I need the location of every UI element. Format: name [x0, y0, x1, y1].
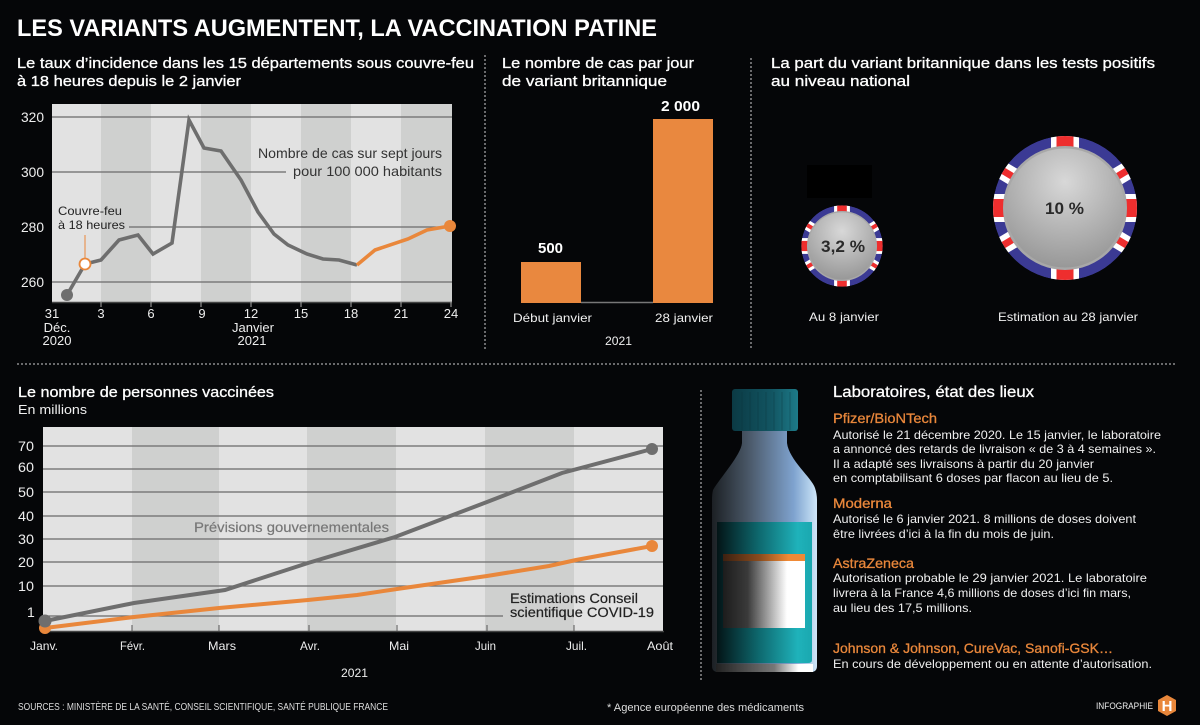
y axis labels: 320: [21, 109, 44, 125]
series: scientific council estimate: [45, 546, 652, 628]
y axis labels: 300: [21, 164, 44, 180]
heading: share of variant: La part du variant britannique dans les tests positifs: [771, 55, 1155, 72]
heading: share of variant: [771, 55, 1155, 90]
x axis labels: 21: [394, 306, 408, 321]
x axis labels: 15: [294, 306, 308, 321]
annotation: government forecast: Prévisions gouvernementales: [194, 519, 389, 535]
annotation: curfew: Couvre-feu: [58, 204, 122, 218]
sources: SOURCES : MINISTÈRE DE LA SANTÉ, CONSEIL SCIENTIFIQUE, SANTÉ PUBLIQUE FRANCE: [18, 700, 388, 713]
credit: INFOGRAPHIE: [1096, 701, 1153, 711]
x axis labels: 24: [444, 306, 458, 321]
heading: share of variant: au niveau national: [771, 73, 910, 90]
marker: grey start: [38, 614, 52, 628]
x axis labels: Juin: [475, 639, 496, 653]
annotation: scientific council: scientifique COVID-19: [510, 604, 654, 620]
x axis labels: [43, 306, 458, 348]
marker: curfew point: [80, 258, 90, 270]
x axis labels: Juil.: [566, 639, 587, 653]
series: grey incidence line: [67, 120, 357, 295]
icon: vaccine bottle: [712, 389, 817, 672]
text block: Moderna: Autorisé le 6 janvier 2021. 8 millions de doses doivent: [833, 512, 1137, 526]
marker: start point: [61, 289, 73, 301]
heading: vaccinated people: En millions: [18, 402, 88, 417]
y axis labels: 50: [18, 484, 34, 500]
y axis labels: [21, 109, 44, 290]
value: 500: 500: [538, 240, 563, 257]
heading: vaccinated people: [18, 384, 274, 417]
text block: other laboratories: Johnson & Johnson, CureVac, Sanofi-GSK…: [833, 640, 1113, 656]
x axis labels: Févr.: [120, 639, 145, 653]
bar: 28 January: [653, 119, 713, 303]
small black patch: [807, 165, 872, 198]
value: 2 000: 2 000: [661, 98, 700, 115]
heading: incidence: [17, 55, 474, 90]
title: LES VARIANTS AUGMENTENT, LA VACCINATION PATINE: [17, 15, 657, 42]
marker: grey end: [646, 443, 658, 455]
annotation: scientific council: Estimations Conseil: [510, 590, 638, 606]
x axis labels: 9: [198, 306, 206, 321]
line chart: incidence rate: [21, 104, 458, 348]
heading: cases per day: de variant britannique: [502, 73, 667, 90]
bar: early January: [521, 262, 581, 303]
x axis labels: Janv.: [30, 639, 58, 653]
heading: vaccinated people: Le nombre de personnes vaccinées: [18, 384, 274, 401]
annotation: curfew: à 18 heures: [58, 218, 125, 232]
x axis labels: 2021: [238, 333, 266, 348]
heading: cases per day: Le nombre de cas par jour: [502, 55, 694, 72]
badge: 10 %: [993, 136, 1137, 280]
text block: Moderna: Moderna: [833, 495, 892, 511]
text block: other laboratories: En cours de développement ou en attente d’autorisation.: [833, 657, 1152, 671]
y axis labels: 1: [27, 604, 35, 620]
x axis labels: 31: [45, 306, 59, 321]
bar chart: variant cases per day: [513, 98, 713, 348]
y axis labels: 10: [18, 578, 34, 594]
x axis labels: 6: [147, 306, 155, 321]
text block: Pfizer: Il a adapté ses livraisons à partir du 20 janvier: [833, 457, 1094, 471]
y axis labels: [18, 438, 35, 620]
marker: orange end: [646, 540, 658, 552]
y axis labels: 280: [21, 219, 44, 235]
icon: logo: H: [1162, 698, 1172, 715]
annotation: curfew: [58, 204, 125, 232]
text block: Pfizer: en comptabilisant 6 doses par flacon au lieu de 5.: [833, 471, 1113, 485]
text block: other laboratories: [833, 640, 1152, 671]
label: 28 January estimate: Estimation au 28 janvier: [998, 310, 1138, 324]
marker: end point: [444, 220, 456, 232]
y axis labels: 40: [18, 508, 34, 524]
text block: AstraZeneca: AstraZeneca: [833, 555, 914, 571]
x axis labels: 12: [244, 306, 258, 321]
x axis labels: 2021: [341, 666, 368, 680]
text block: Pfizer: Pfizer/BioNTech: [833, 410, 937, 426]
y axis labels: 30: [18, 531, 34, 547]
series: orange incidence line: [357, 226, 450, 265]
marker: curfew leader: [84, 235, 86, 258]
text block: Moderna: être livrées d’ici à la fin du mois de juin.: [833, 527, 1054, 541]
text block: AstraZeneca: livrera à la France 4,6 millions de doses d’ici fin mars,: [833, 586, 1131, 600]
text block: AstraZeneca: Autorisation probable le 29 janvier 2021. Le laboratoire: [833, 571, 1147, 585]
badge: 3,2 %: [801, 205, 883, 287]
x axis labels: Déc.: [44, 320, 70, 335]
line chart: vaccinated people: [18, 427, 674, 680]
footnote: * Agence européenne des médicaments: [607, 702, 805, 714]
heading: laboratories: Laboratoires, état des lieux: [833, 384, 1034, 401]
y axis labels: 20: [18, 554, 34, 570]
x axis labels: 18: [344, 306, 358, 321]
heading: cases per day: [502, 55, 694, 90]
x axis labels: Mai: [389, 639, 409, 653]
label: 2021: 2021: [605, 334, 632, 348]
label: 28 January: 28 janvier: [655, 311, 713, 325]
text block: Moderna: [833, 495, 1137, 541]
x axis labels: 2020: [43, 333, 71, 348]
y axis labels: 60: [18, 459, 34, 475]
x axis labels: [30, 639, 674, 680]
marker: orange start: [39, 622, 51, 634]
text block: AstraZeneca: [833, 555, 1147, 615]
label: 8 January: Au 8 janvier: [809, 310, 879, 324]
x axis labels: Août: [647, 639, 674, 653]
annotation: seven-day cases: [258, 145, 442, 179]
annotation: scientific council: [510, 590, 654, 620]
x axis labels: Janvier: [232, 320, 275, 335]
annotation: seven-day cases: pour 100 000 habitants: [293, 163, 442, 179]
annotation: seven-day cases: Nombre de cas sur sept jours: [258, 145, 442, 161]
label: early January: Début janvier: [513, 311, 592, 325]
series: government forecast: [45, 449, 652, 621]
badge: 3,2 %: 3,2 %: [821, 237, 865, 256]
y axis labels: 70: [18, 438, 34, 454]
text block: Pfizer: Autorisé le 21 décembre 2020. Le 15 janvier, le laboratoire: [833, 428, 1161, 442]
text block: AstraZeneca: au lieu des 17,5 millions.: [833, 601, 972, 615]
x axis labels: 3: [97, 306, 105, 321]
x axis labels: Avr.: [300, 639, 320, 653]
y axis labels: 260: [21, 274, 44, 290]
x axis labels: Mars: [208, 639, 236, 653]
text block: Pfizer: [833, 410, 1161, 485]
heading: incidence: à 18 heures depuis le 2 janvier: [17, 73, 241, 90]
badge: 10 %: 10 %: [1045, 199, 1084, 218]
icon: logo: [1158, 695, 1176, 716]
text block: Pfizer: a annoncé des retards de livraison « de 3 à 4 semaines ».: [833, 442, 1156, 456]
heading: incidence: Le taux d’incidence dans les 15 départements sous couvre-feu: [17, 55, 474, 72]
